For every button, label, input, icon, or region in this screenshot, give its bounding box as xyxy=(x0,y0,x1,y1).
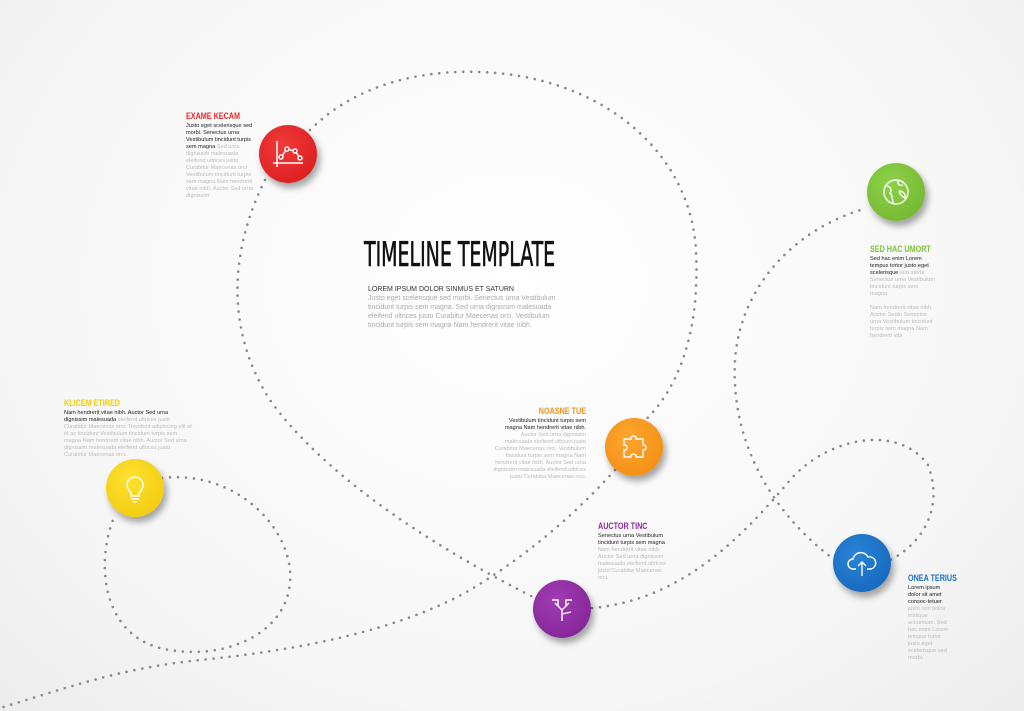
block: klicem etired: Nam hendrerit vitae nibh. Auctor Sed urna dignissim malesuada eleifend ultrices justo Curabitur Maecenas orci. Tincidunt adipiscing elit et et ac tincidunt Vestibulum tincidunt turpis sem magna Nam hendrerit vitae nibh. Auctor Sed urna dignissim malesuada eleifend ultrices justo Curabitur Maecenas orci. xyxy=(64,410,192,458)
block: exame kecam: Justo eget scelerisque sed morbi. Senectus urna Vestibulum tincidunt turpis sem magna Sed urna dignissim malesuada eleifend ultrices justo Curabitur Maecenas orci Vestibulum tincidunt turpis sem magna Nam hendrerit vitae nibh. Auctor Sed urna dignissim xyxy=(186,123,253,199)
block: onea terius xyxy=(908,573,957,661)
title: TIMELINE TEMPLATE xyxy=(364,235,555,275)
block: noasne tue: Vestibulum tincidunt turpis sem magna Nam hendrerit vitae nibh. Auctor Sed urna dignissim malesuada eleifend ultrices justo Curabitur Maecenas orci. Vestibulum tincidunt turpis sem magna Nam hendrerit vitae nibh. Auctor Sed urna dignissim malesuada eleifend ultrices justo Curabitur Maecenas orci. xyxy=(493,418,586,480)
block: noasne tue: NOASNE TUE xyxy=(539,406,586,416)
icon: purple arrows xyxy=(533,580,591,638)
icon: orange puzzle xyxy=(605,418,663,476)
block: klicem etired: KLICEM ETIRED xyxy=(64,398,120,408)
block: onea terius: ONEA TERIUS xyxy=(908,573,957,583)
block: auctor tinc: AUCTOR TINC xyxy=(598,521,647,531)
block: sed hac umort: Sed hac enim Lorem tempus tortor justo eget scelerisque sed morbi. Senectus urna Vestibulum tincidunt turpis sem magna xyxy=(870,256,935,297)
block: exame kecam: EXAME KECAM xyxy=(186,111,240,121)
icon: green globe xyxy=(867,163,925,221)
icon: red chart xyxy=(259,125,317,183)
intro text: Justo eget scelerisque sed morbi. Senectus urna Vestibulum tincidunt turpis sem magna. Sed urna dignissim malesuada eleifend ultrices justo Curabitur Maecenas orci. Vestibulum tincidunt turpis sem magna Nam hendrerit vitae nibh. xyxy=(368,295,556,329)
icon: yellow bulb xyxy=(106,459,164,517)
block: sed hac umort xyxy=(870,244,935,339)
block: sed hac umort: SED HAC UMORT xyxy=(870,244,931,254)
block: onea terius: Lorem ipsum dolor sit amet consec-tetuer justo non fellos tristique accumsan. Sed hac enim Lorem tempus tortor justo eget scelerisque sed morbi. xyxy=(908,585,948,661)
block: sed hac umort: Nam hendrerit vitae nibh. Auctor Sedin Senectus urna Vestibulum tincidunt turpis sem magna Nam hendrerit vita xyxy=(870,305,933,339)
intro text: LOREM IPSUM DOLOR SINMUS ET SATURN xyxy=(368,286,514,293)
block: auctor tinc: Senectus urna Vestibulum tincidunt turpis sem magna Nam hendrerit vitae nibh. Auctor Sed urna dignissim malesuada eleifend ultrices justo Curabitur Maecenas orci. xyxy=(598,533,666,581)
icon: blue cloud xyxy=(833,534,891,592)
